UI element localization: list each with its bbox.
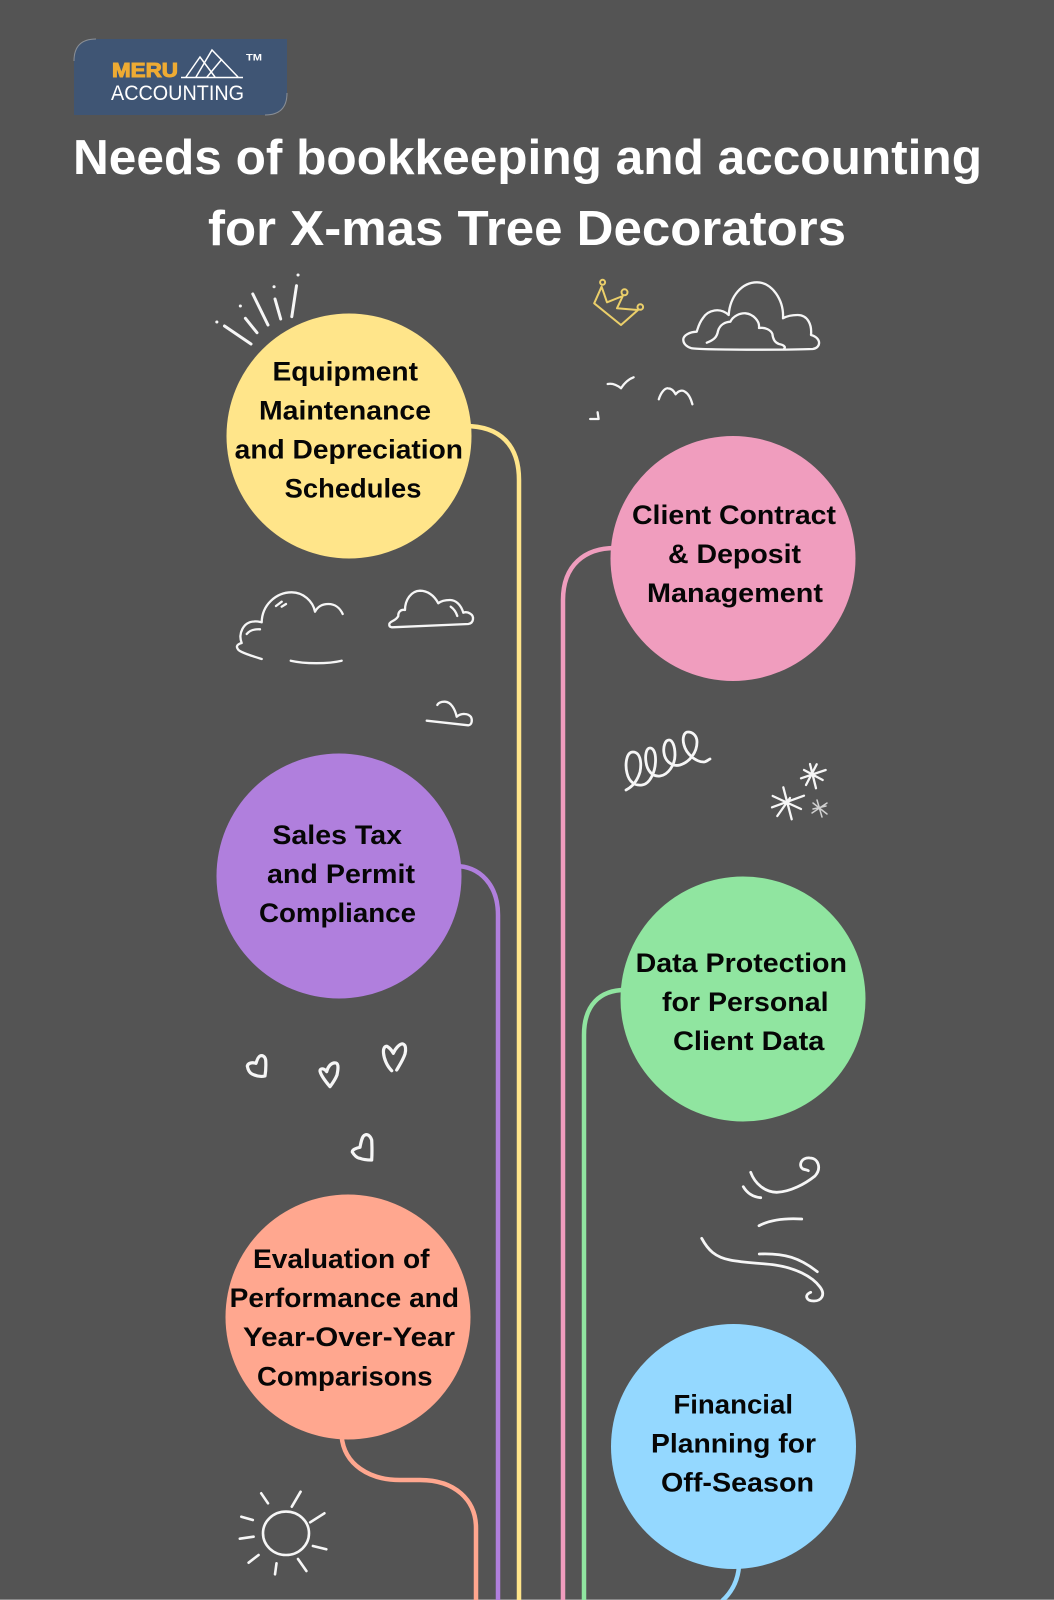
icon: squiggle	[626, 732, 710, 790]
connector: yellow line	[465, 426, 519, 1600]
connector: green line	[584, 990, 625, 1600]
node: sales tax	[216, 754, 462, 998]
node: sales tax: Compliance	[259, 898, 416, 928]
icon: hearts	[247, 1044, 406, 1160]
icon: birds	[590, 377, 692, 419]
node: evaluation of performance	[226, 1194, 470, 1440]
logo: Meru Accounting	[74, 39, 287, 115]
icon: crown	[594, 280, 643, 325]
icon: sparkles	[772, 764, 827, 819]
node: evaluation of performance: Performance and	[230, 1283, 459, 1313]
node: client contract: & Deposit	[668, 539, 801, 569]
icon: large cloud	[683, 282, 819, 350]
node: client contract: Client Contract	[632, 500, 836, 530]
title	[73, 131, 982, 256]
connector: pink line	[563, 548, 615, 1600]
node: equipment maintenance: Schedules	[285, 474, 422, 504]
title: for X-mas Tree Decorators	[208, 202, 846, 256]
title: Needs of bookkeeping and accounting	[73, 131, 982, 185]
icon: tiny cloud	[427, 702, 472, 725]
node: sales tax: and Permit	[267, 859, 415, 889]
logo: Meru Accounting: MERU	[112, 60, 178, 82]
node: data protection: for Personal	[662, 987, 828, 1017]
node: financial planning	[611, 1324, 856, 1569]
node: client contract: Management	[647, 578, 823, 608]
logo: Meru Accounting: ACCOUNTING	[111, 82, 244, 105]
icon: small cloud right	[389, 591, 473, 627]
node: sales tax: Sales Tax	[272, 820, 402, 850]
node: evaluation of performance: Evaluation of	[253, 1244, 431, 1274]
icon: clouds left	[237, 592, 343, 663]
node: evaluation of performance: Year-Over-Year	[243, 1322, 456, 1352]
node: equipment maintenance: and Depreciation	[235, 434, 463, 464]
connector: purple line	[455, 866, 498, 1600]
connector: salmon line	[342, 1436, 476, 1600]
node: data protection: Client Data	[673, 1026, 825, 1056]
node: financial planning: Planning for	[651, 1428, 817, 1458]
node: equipment maintenance: Equipment	[272, 356, 418, 386]
icon: wind swirls	[702, 1158, 823, 1301]
node: equipment maintenance	[226, 314, 472, 558]
node: client contract	[610, 436, 856, 681]
connector: blue line	[722, 1566, 739, 1600]
icon: sun	[240, 1492, 326, 1574]
node: data protection: Data Protection	[636, 948, 847, 978]
node: evaluation of performance: Comparisons	[257, 1362, 433, 1392]
node: financial planning: Off-Season	[661, 1468, 814, 1498]
node: equipment maintenance: Maintenance	[259, 396, 431, 426]
icon: burst rays	[217, 275, 298, 344]
node: financial planning: Financial	[673, 1390, 793, 1420]
logo: Meru Accounting: TM	[246, 52, 262, 62]
node: data protection	[620, 876, 866, 1122]
